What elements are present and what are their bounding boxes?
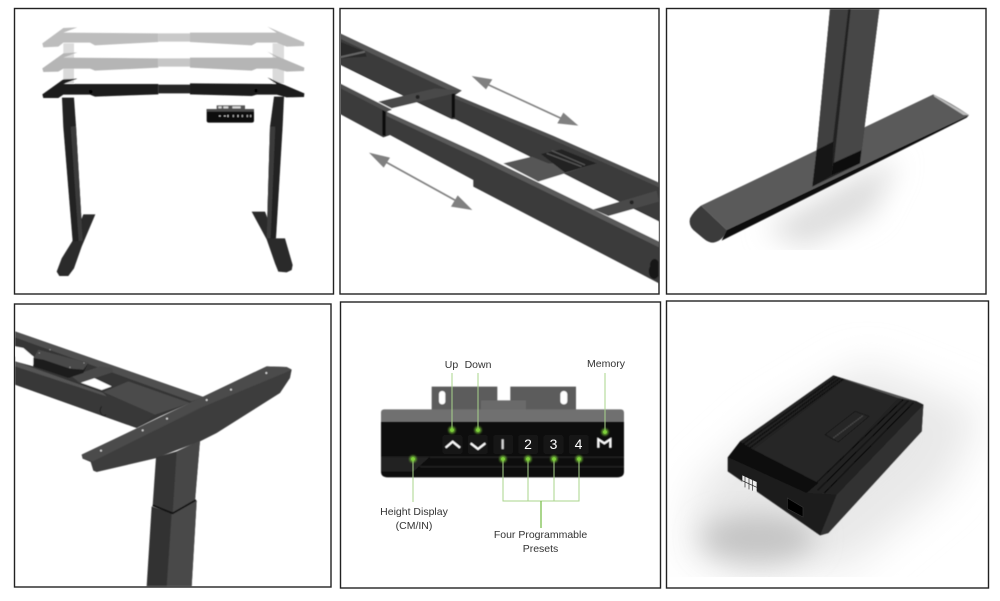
white gap between beams (340, 65, 659, 242)
left leg (57, 98, 95, 276)
preset number labels: 4 (575, 436, 583, 452)
rear beam (340, 33, 659, 222)
box shadow (685, 365, 982, 578)
preset number labels: 2 (524, 436, 532, 452)
lower column (147, 501, 197, 586)
callout labels: Four Programmable (494, 529, 587, 541)
panel: control box (666, 301, 988, 588)
callout labels (380, 358, 626, 555)
ghost frame: middle position (42, 52, 305, 72)
preset number labels: 3 (550, 436, 558, 452)
arrow: upper sliding direction (472, 76, 578, 126)
callout labels: (CM/IN) (396, 520, 432, 532)
callout labels: Up (445, 359, 458, 371)
callout labels: Presets (523, 543, 558, 555)
arrow: lower sliding direction (369, 153, 472, 210)
right leg (252, 97, 293, 272)
callout labels: Memory (587, 358, 626, 370)
panel: close-up of foot (666, 8, 986, 294)
callout labels: Height Display (380, 506, 449, 518)
soft floor shadow (765, 160, 898, 247)
sliding connector plates (378, 88, 659, 216)
box body (728, 375, 923, 535)
panel: top bracket and lifting column (14, 304, 331, 587)
callout labels: Down (465, 359, 492, 371)
upper column (153, 441, 200, 514)
black desk frame crossbar (42, 77, 304, 98)
upright column (812, 9, 879, 187)
mini control panel (207, 105, 254, 123)
panel: height adjustable desk frame (14, 8, 334, 294)
lower front beam (340, 83, 659, 283)
preset number labels (524, 436, 583, 452)
box connector port (742, 475, 757, 492)
crossbar rails (15, 331, 203, 428)
motor mount plate (33, 349, 88, 378)
box square socket (787, 498, 803, 517)
green callout lines (413, 373, 605, 528)
foot plate (690, 94, 969, 243)
panel: telescoping crossbar (340, 8, 659, 294)
panel: control panel callouts (340, 302, 660, 588)
ghost frame: raised top position (42, 27, 305, 70)
green indicator dots (410, 426, 608, 462)
control keypad (381, 387, 624, 477)
T bracket (82, 366, 292, 472)
